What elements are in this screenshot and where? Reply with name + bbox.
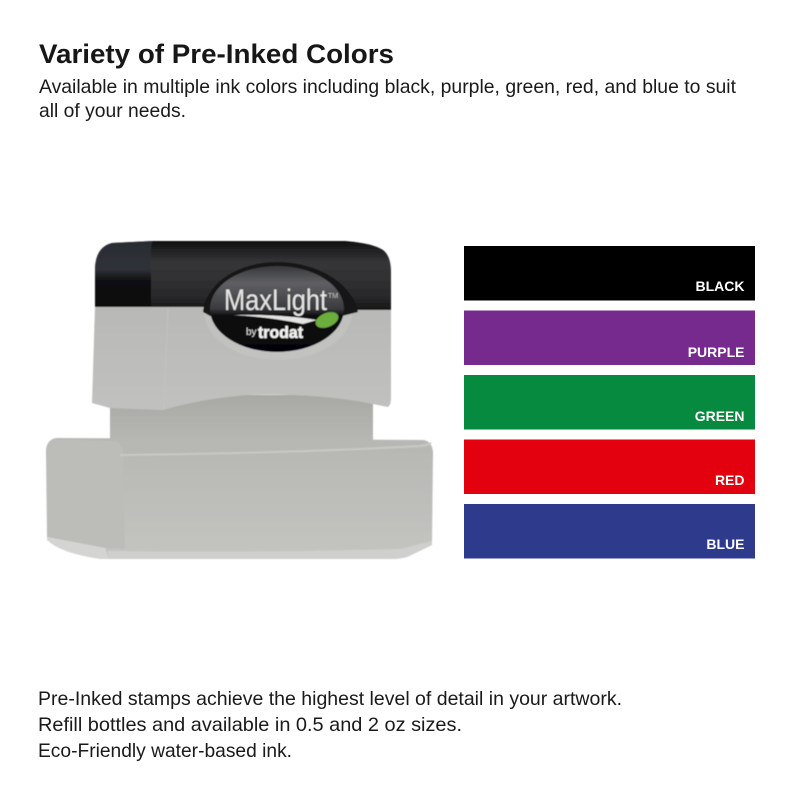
swatch: black bbox=[464, 246, 755, 300]
bottom text bbox=[38, 688, 622, 762]
swatch: blue bbox=[464, 504, 755, 558]
title: Variety of Pre-Inked Colors bbox=[39, 39, 394, 69]
stamp neck bbox=[110, 395, 373, 447]
logo oval bbox=[203, 262, 358, 360]
swatch: black: BLACK bbox=[696, 278, 744, 294]
bottom text: Refill bottles and available in 0.5 and 2 oz sizes. bbox=[38, 714, 462, 736]
swatch: purple bbox=[464, 310, 755, 365]
logo leaf bbox=[313, 309, 341, 331]
swatch: purple: PURPLE bbox=[688, 344, 744, 360]
intro text: all of your needs. bbox=[39, 100, 186, 122]
bottom text: Pre-Inked stamps achieve the highest level of detail in your artwork. bbox=[38, 688, 622, 710]
stamp black cap bbox=[95, 241, 391, 314]
stamp grey body bbox=[92, 307, 391, 410]
stamp illustration bbox=[46, 241, 433, 559]
logo oval: TM bbox=[328, 293, 338, 300]
swatch: green: GREEN bbox=[695, 408, 744, 424]
intro text bbox=[39, 76, 737, 122]
logo byline: by bbox=[246, 327, 257, 338]
swatch: blue: BLUE bbox=[706, 536, 744, 552]
color swatches bbox=[464, 246, 755, 558]
swatch: red bbox=[464, 440, 755, 494]
bottom text: Eco-Friendly water-based ink. bbox=[38, 740, 292, 762]
stamp base bbox=[46, 438, 433, 559]
swatch: green bbox=[464, 375, 755, 430]
logo wordmark: MaxLight bbox=[224, 284, 328, 317]
logo oval: trodat bbox=[258, 323, 303, 342]
swatch: red: RED bbox=[715, 472, 744, 488]
intro text: Available in multiple ink colors including black, purple, green, red, and blue to suit bbox=[39, 76, 737, 98]
